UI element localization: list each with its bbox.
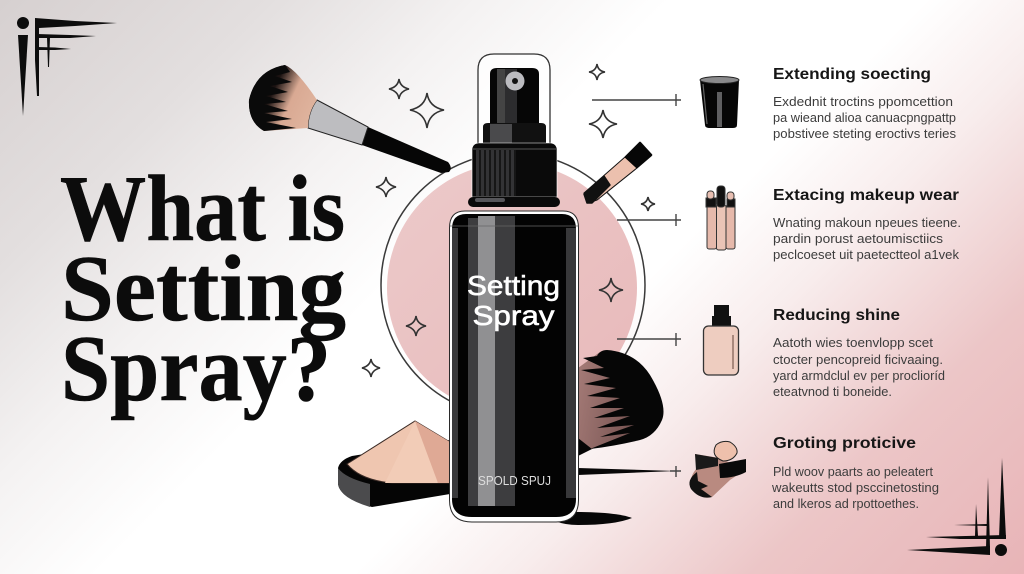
tube base <box>584 176 610 203</box>
large kabuki brush <box>578 350 664 456</box>
icon: sponge and brush <box>689 441 746 498</box>
bottle body <box>450 211 578 522</box>
heading 3: Reducing shine <box>773 307 900 324</box>
body 2: peclcoeset uit paetectteol a1vek <box>773 248 960 262</box>
body 3 <box>773 336 945 399</box>
connector line 3 <box>617 333 681 346</box>
setting spray bottle <box>450 54 578 522</box>
pink circle backdrop with ring <box>381 153 645 417</box>
powder cone <box>347 421 450 483</box>
title: Spray? <box>61 317 331 421</box>
body 1: Exdednit troctins ppomcettion <box>773 95 953 109</box>
body 3: Aatoth wies toenvlopp scet <box>773 336 934 350</box>
benefit 1 <box>700 66 956 141</box>
connector line 2 <box>617 214 681 226</box>
corner ornament: bottom right <box>907 458 1007 556</box>
tube cap <box>626 143 651 167</box>
icon: black cup <box>700 76 739 128</box>
title: Setting <box>61 237 346 341</box>
body 2: Wnating makoun npeues tieene. <box>773 216 961 230</box>
bottle small print: SPOLD SPUJ <box>478 474 551 488</box>
makeup brush: top left <box>249 65 451 173</box>
body 3: yard armdclul ev per proclioríd <box>773 369 945 383</box>
title <box>60 157 346 421</box>
icon: three tubes <box>706 186 735 250</box>
brush handle <box>362 127 451 173</box>
icon: foundation bottle <box>704 305 738 375</box>
body 2: pardin porust aetoumisctiics <box>773 232 943 246</box>
bottle label: Setting <box>467 270 560 301</box>
powder compact <box>338 421 450 507</box>
pump neck <box>483 123 546 143</box>
clear cap <box>478 54 550 143</box>
body 3: ctocter pencopreid ficivaaing. <box>773 353 943 367</box>
bottle body: Spray <box>472 300 554 331</box>
benefit 3 <box>704 305 945 399</box>
body 3: eteatvnod ti boneide. <box>773 385 892 399</box>
title: What is <box>60 157 345 261</box>
connector line 1 <box>592 94 681 106</box>
ribbed collar <box>468 143 560 207</box>
body 2 <box>773 216 961 262</box>
body 4: Pld woov paarts ao peleatert <box>773 465 934 479</box>
heading 2: Extacing makeup wear <box>773 187 959 204</box>
brush bristles <box>249 65 317 131</box>
benefit 4 <box>689 435 939 511</box>
benefit 2 <box>706 186 961 262</box>
brush ferrule <box>308 100 368 145</box>
sparkles <box>362 64 655 377</box>
body 4: wakeutts stod psccinetosting <box>771 481 939 495</box>
nozzle <box>506 72 524 90</box>
body 1: pobstivee steting eroctivs teries <box>773 127 956 141</box>
body 1 <box>773 95 956 141</box>
body 4 <box>771 465 939 511</box>
tube body <box>584 157 637 203</box>
bottle shadow <box>555 512 632 525</box>
pump actuator <box>490 68 539 123</box>
body 1: pa wieand alioa canuacpngpattp <box>773 111 956 125</box>
tapered connector line 4 <box>578 466 681 477</box>
heading 1: Extending soecting <box>773 66 931 83</box>
body 4: and lkeros ad rpottoethes. <box>773 497 919 511</box>
heading 4: Groting proticive <box>773 435 916 452</box>
lip gloss tube <box>584 143 651 203</box>
corner ornament: top left <box>17 17 117 116</box>
